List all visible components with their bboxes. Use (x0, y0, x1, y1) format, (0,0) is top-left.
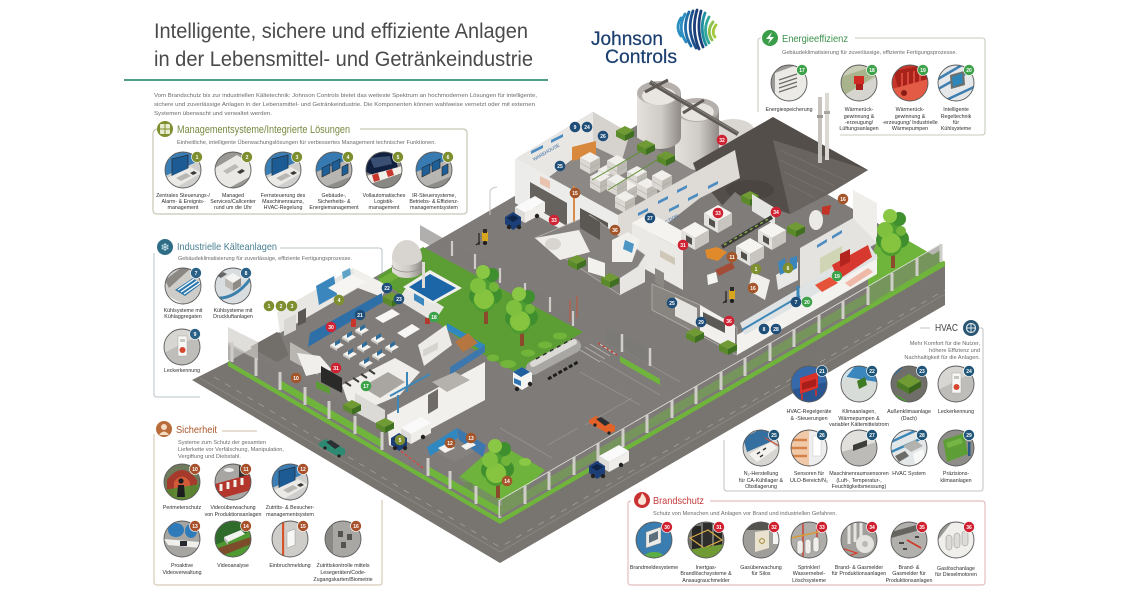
item 7 (164, 268, 203, 320)
item 1: 1 (196, 155, 199, 161)
item 29 (938, 430, 974, 484)
item 27: Maschinenraumsensoren (829, 471, 889, 477)
item 11: 11 (243, 467, 249, 473)
map number markers: 20 (804, 300, 810, 306)
item 36: 36 (966, 525, 972, 531)
item 21: & -Steuerungen (790, 416, 828, 422)
item 8: Druckluftanlagen (213, 314, 253, 320)
item 26 (790, 430, 828, 484)
map number markers: 33 (715, 211, 721, 217)
item 6: Betriebs- & Effizienz- (409, 199, 459, 205)
item 26: Sensoren für (794, 471, 824, 477)
item 1: Zentrales Steuerungs-/ (156, 193, 210, 199)
map number markers: 22 (384, 286, 390, 292)
item 2: rund um die Uhr (214, 205, 252, 211)
subtitle: HVAC: Nachhaltigkeit für die Anlagen. (904, 355, 980, 361)
item 4: Energiemanagement (309, 205, 359, 211)
pool and dome tank (378, 240, 462, 304)
subtitle: Brandschutz: Schutz von Menschen und Anlagen vor Brand und industriellen Gefahren. (653, 511, 837, 517)
item 35: 35 (919, 525, 925, 531)
item 31 (680, 522, 732, 584)
map number markers: 13 (468, 436, 474, 442)
map number markers: 21 (357, 313, 363, 319)
subtitle: Sicherheit: Vergiftung und Diebstahl. (178, 454, 241, 460)
item 23 (887, 366, 931, 422)
production wall label: PRODUCTION (650, 213, 679, 233)
item 28: 28 (919, 433, 925, 439)
item 35 (886, 522, 932, 584)
item 22 (829, 366, 889, 428)
map number markers: 10 (293, 376, 299, 382)
item 20: Kühlsysteme (941, 126, 971, 132)
item 27: (Luft-, Temperatur-, (836, 478, 882, 484)
item 18: Wärmerück- (845, 107, 874, 113)
item 16 (313, 520, 373, 583)
icon: snowflake (157, 239, 173, 255)
lamp post (490, 187, 497, 215)
item 5 (363, 152, 406, 211)
item 33: Löschsysteme (792, 578, 826, 584)
subtitle: HVAC: höhere Effizienz und (929, 348, 980, 354)
yard ground (228, 105, 945, 520)
item 6: IR-Steuersysteme, (412, 193, 456, 199)
item 13: Proaktive (171, 563, 193, 569)
item 33: 33 (819, 525, 825, 531)
item 13: Videoverwaltung (162, 570, 202, 576)
heading: Brandschutz: Brandschutz (653, 495, 704, 507)
item 36: für Dieselmotoren (935, 572, 977, 578)
item 4: 4 (347, 155, 350, 161)
item 20 (938, 64, 974, 132)
item 22: Klimaanlagen, (842, 409, 876, 415)
subtitle: Energieeffizienz: Gebäudeklimatisierung für zuverlässige, effiziente Fertigungsprozesse. (782, 50, 957, 56)
item 34: 34 (869, 525, 875, 531)
item 7: Kühlsysteme mit (164, 308, 203, 314)
icon: person (156, 421, 172, 437)
logo: Johnson Controls: Controls (605, 46, 677, 68)
item 35: Produktionsanlagen (886, 578, 932, 584)
icon: HVAC (963, 320, 979, 336)
dark roof (693, 117, 868, 214)
item 23: 23 (919, 369, 925, 375)
map number markers: 25 (669, 301, 675, 307)
map number markers: 14 (504, 479, 510, 485)
item 17: 17 (799, 68, 805, 74)
item 1: Alarm- & Ereignis- (162, 199, 205, 205)
item 27 (829, 430, 889, 490)
item 18: Lüftungsanlagen (839, 126, 879, 132)
item 26: 26 (819, 433, 825, 439)
tanker truck (513, 339, 578, 391)
item 7: 7 (195, 271, 198, 277)
corner garden with trees (458, 439, 545, 513)
item 31: Inertgas- (696, 565, 717, 571)
item 25 (739, 430, 784, 490)
map number markers: 12 (447, 441, 453, 447)
item 20: Intelligente (943, 107, 969, 113)
item 9: Leckerkennung (164, 368, 200, 374)
map number markers: 1 (268, 304, 271, 310)
item 29: klimaanlagen (940, 478, 972, 484)
map number markers: 27 (647, 216, 653, 222)
logo: Johnson Controls (591, 10, 716, 68)
map number markers: 33 (551, 218, 557, 224)
item 31: Brandlöschsysteme & (680, 571, 732, 577)
item 34: Brand- & Gasmelder (835, 565, 883, 571)
item 34 (832, 522, 886, 577)
item 10: Perimeterschutz (163, 505, 201, 511)
item 12: managementsystem (266, 512, 314, 518)
title: Intelligente, sichere und effiziente Anlagen (154, 20, 528, 43)
map number markers: 36 (612, 228, 618, 234)
map number markers: 19 (834, 274, 840, 280)
item 15 (269, 520, 311, 569)
item 6: 6 (447, 155, 450, 161)
item 18: gewinnung & (844, 114, 875, 120)
item 4: Gebäude-, (321, 193, 347, 199)
road (192, 264, 945, 563)
item 22: 22 (869, 369, 875, 375)
heading: management: Managementsysteme/Integrierte Lösungen (177, 124, 350, 136)
item 3 (261, 152, 306, 211)
subtitle: Sicherheit: Lieferkette vor Verfälschung, Manipulation, (178, 447, 284, 453)
item 21 (787, 366, 832, 422)
item 4: Sicherheits- & (318, 199, 351, 205)
item 19: 19 (920, 68, 926, 74)
item 22: Wärmepumpen & (838, 416, 880, 422)
item 19: -erzeugung/ Industrielle (882, 120, 938, 126)
production hall (632, 190, 877, 327)
map number markers: 31 (333, 366, 339, 372)
item 35: Gasmelder für (892, 571, 926, 577)
item 31: 31 (716, 525, 722, 531)
lower right service rooms (652, 245, 878, 355)
item 5: management (369, 205, 400, 211)
item 13: 13 (192, 524, 198, 530)
item 18: 18 (869, 68, 875, 74)
item 31: Ansaugrauchmelder (682, 578, 730, 584)
left fence (228, 327, 500, 518)
item 19: Wärmepumpen (892, 126, 928, 132)
item 3: HVAC-Regelung (264, 205, 302, 211)
map number markers: 15 (572, 191, 578, 197)
title: in der Lebensmittel- und Getränkeindustrie (154, 48, 533, 71)
item 24 (938, 366, 974, 415)
item 8 (213, 268, 253, 320)
right fence (500, 244, 941, 518)
trees (469, 209, 909, 368)
item 16: 16 (353, 524, 359, 530)
item 3: 3 (296, 155, 299, 161)
logo: Johnson Controls: Johnson (591, 28, 663, 50)
map number markers: 3 (291, 304, 294, 310)
item 5: Vollautomatisches (363, 193, 406, 199)
item 22: variabler Kältemittelstrom (829, 422, 889, 428)
subtitle: Sicherheit (178, 440, 284, 460)
heading: HVAC: HVAC (935, 323, 958, 334)
item 5: Logistik- (374, 199, 394, 205)
heading: Sicherheit: Sicherheit (176, 424, 217, 436)
map number markers: 16 (750, 286, 756, 292)
item 21: HVAC-Regelgeräte (787, 409, 832, 415)
map: isometric factory site (192, 80, 945, 563)
item 29: 29 (966, 433, 972, 439)
map number markers: 11 (729, 255, 735, 261)
intro text: Vom Brandschutz bis zur industriellen Kältetechnik: Johnson Controls bietet das weiteste Spektrum an hochmodernen Lösungen für intelligente, (154, 93, 537, 99)
map number markers: 1 (755, 267, 758, 273)
vehicles (319, 187, 629, 479)
entrance pad (250, 332, 303, 362)
inner fence by the lawn (420, 225, 577, 328)
item 35: Brand- & (899, 565, 920, 571)
item 2: Services/Callcenter (210, 199, 256, 205)
item 14: 14 (243, 524, 249, 530)
item 19: gewinnung & (895, 114, 926, 120)
map number markers: 4 (338, 298, 341, 304)
map number markers: 16 (840, 197, 846, 203)
item 24: Leckerkennung (938, 409, 974, 415)
subtitle: HVAC: Mehr Komfort für die Nutzer, (910, 341, 980, 347)
warehouse (515, 112, 740, 262)
item 14 (215, 520, 252, 569)
curb green strips (228, 261, 945, 524)
warehouse wall label: WAREHOUSE (532, 143, 560, 162)
item 1: management (168, 205, 199, 211)
item 2: Managed (222, 193, 244, 199)
heading: Kälteanlagen: Industrielle Kälteanlagen (177, 241, 277, 253)
item 25: 25 (771, 433, 777, 439)
item 15: Einbruchmeldung (269, 563, 311, 569)
item 11: von Produktionsanlagen (205, 512, 261, 518)
map number markers: 29 (698, 320, 704, 326)
item 30 (630, 522, 678, 571)
item 1 (156, 152, 210, 211)
item 36: Gaslöschanlage (937, 566, 975, 572)
item 29: Präzisions- (943, 471, 969, 477)
chimneys (817, 93, 830, 163)
office building (277, 268, 485, 448)
item 3: Maschinenraums, (262, 199, 304, 205)
subtitle: Kälteanlagen: Gebäudeklimatisierung für zuverlässige, effiziente Fertigungsprozesse. (178, 256, 352, 262)
map number markers: 8 (763, 327, 766, 333)
map number markers: 31 (680, 243, 686, 249)
item 5: 5 (397, 155, 400, 161)
item 32 (740, 522, 782, 577)
map number markers: 17 (363, 384, 369, 390)
item 19 (882, 64, 938, 132)
item 9: 9 (194, 332, 197, 338)
item 8: 8 (245, 271, 248, 277)
lawn (377, 247, 583, 373)
icon: energy (762, 30, 778, 46)
item 20: Regeltechnik (941, 114, 972, 120)
item 33 (791, 522, 828, 584)
gatehouse (427, 428, 486, 462)
item 28 (891, 430, 928, 477)
map number markers: 18 (431, 315, 437, 321)
item 12 (266, 464, 315, 518)
panel: HVAC (724, 320, 983, 491)
item 16: Zutrittskontrolle mittels (317, 563, 370, 569)
map number markers: 7 (795, 300, 798, 306)
item 32: Gasüberwachung (740, 565, 782, 571)
panel: Managementsysteme (153, 121, 467, 214)
item 14: Videoanalyse (217, 563, 249, 569)
item 12: Zutritts- & Besucher- (266, 505, 315, 511)
silos and conveyor (637, 80, 755, 187)
item 6: managementsystem (410, 205, 458, 211)
item 8: Kühlsysteme mit (214, 308, 253, 314)
item 24: 24 (966, 369, 972, 375)
item 21: 21 (819, 369, 825, 375)
item 30: 30 (664, 525, 670, 531)
item 11: Videoüberwachung (210, 505, 256, 511)
icon: management (157, 121, 173, 137)
title rule (124, 79, 548, 81)
item 32: 32 (771, 525, 777, 531)
chiller room (535, 210, 645, 295)
subtitle: Sicherheit: Systeme zum Schutz der gesamten (178, 440, 266, 446)
item 7: Kühlaggregaten (164, 314, 202, 320)
title (154, 20, 533, 71)
item 11 (205, 464, 261, 518)
map number markers: 6 (787, 266, 790, 272)
map number markers: 34 (773, 210, 779, 216)
item 33: Wassernebel- (793, 571, 825, 577)
item 12: 12 (300, 467, 306, 473)
item 20: für (953, 120, 959, 126)
item 2: 2 (246, 155, 249, 161)
item 6 (409, 152, 459, 211)
item 34: für Produktionsanlagen (832, 571, 886, 577)
right hall wall (800, 218, 877, 288)
map number markers: 30 (328, 325, 334, 331)
item 25: für CA-Kühllager & (739, 478, 784, 484)
item 26: ULO-Bereich/N₂ (790, 478, 828, 484)
item 27: 27 (869, 433, 875, 439)
map number markers: 28 (773, 327, 779, 333)
item 13 (162, 520, 202, 576)
item 9 (164, 328, 200, 374)
item 16: Zugangskarten/Biometrie (313, 577, 373, 583)
item 30: Brandmeldesysteme (630, 565, 678, 571)
panel: Brandschutz (628, 492, 985, 585)
intro text (154, 93, 537, 117)
gate barriers (393, 343, 617, 468)
item 19: Wärmerück- (896, 107, 925, 113)
panel: Energieeffizienz (758, 30, 985, 135)
item 2 (210, 152, 256, 211)
item 28: HVAC System (892, 471, 926, 477)
map number markers: 25 (557, 164, 563, 170)
map number markers: 26 (600, 134, 606, 140)
item 18: -erzeugung/ (845, 120, 874, 126)
map number markers (264, 122, 848, 486)
subtitle: HVAC (904, 341, 980, 361)
item 23: Außenklimaanlage (887, 409, 931, 415)
item 20: 20 (966, 68, 972, 74)
map number markers: 5 (399, 438, 402, 444)
map number markers: 32 (719, 138, 725, 144)
intro text: Systemen überwacht und verwaltet werden. (154, 111, 272, 117)
map number markers: 24 (584, 125, 590, 131)
map number markers: 9 (574, 125, 577, 131)
item 4 (309, 152, 359, 211)
item 32: für Silos (751, 571, 771, 577)
item 25: Obstlagerung (745, 484, 777, 490)
right grass patch (868, 236, 945, 305)
icon: snowflake: ❄ (160, 241, 170, 254)
item 23: (Dach) (901, 416, 917, 422)
item 17 (765, 64, 813, 113)
item 10: 10 (192, 467, 198, 473)
map number markers: 2 (280, 304, 283, 310)
panel: Industrielle Kälteanlagen (154, 239, 382, 397)
item 16: Lesegeräten/Code- (320, 570, 366, 576)
heading: Energieeffizienz: Energieeffizienz (782, 33, 848, 45)
item 33: Sprinkler/ (798, 565, 821, 571)
item 27: Feuchtigkeitsmessung) (832, 484, 886, 490)
map number markers: 23 (396, 297, 402, 303)
item 15: 15 (300, 524, 306, 530)
icon: flame (634, 492, 650, 508)
item 10 (163, 464, 201, 511)
item 3: Fernsteuerung des (261, 193, 306, 199)
item 18 (839, 64, 879, 132)
item 36 (935, 522, 977, 578)
map number markers: 36 (726, 319, 732, 325)
subtitle: management: Einheitliche, intelligente Überwachungslösungen für verbessertes Management technischer Funktionen. (177, 139, 436, 146)
item 25: N₂-Herstellung (744, 471, 778, 477)
item 17: Energiespeicherung (765, 107, 813, 113)
intro text: sichere und zuverlässige Anlagen in der Lebensmittel- und Getränkeindustrie. Die Komponenten können wahlweise vernetzt oder mit externen (154, 102, 535, 108)
panel: Sicherheit (154, 421, 382, 585)
